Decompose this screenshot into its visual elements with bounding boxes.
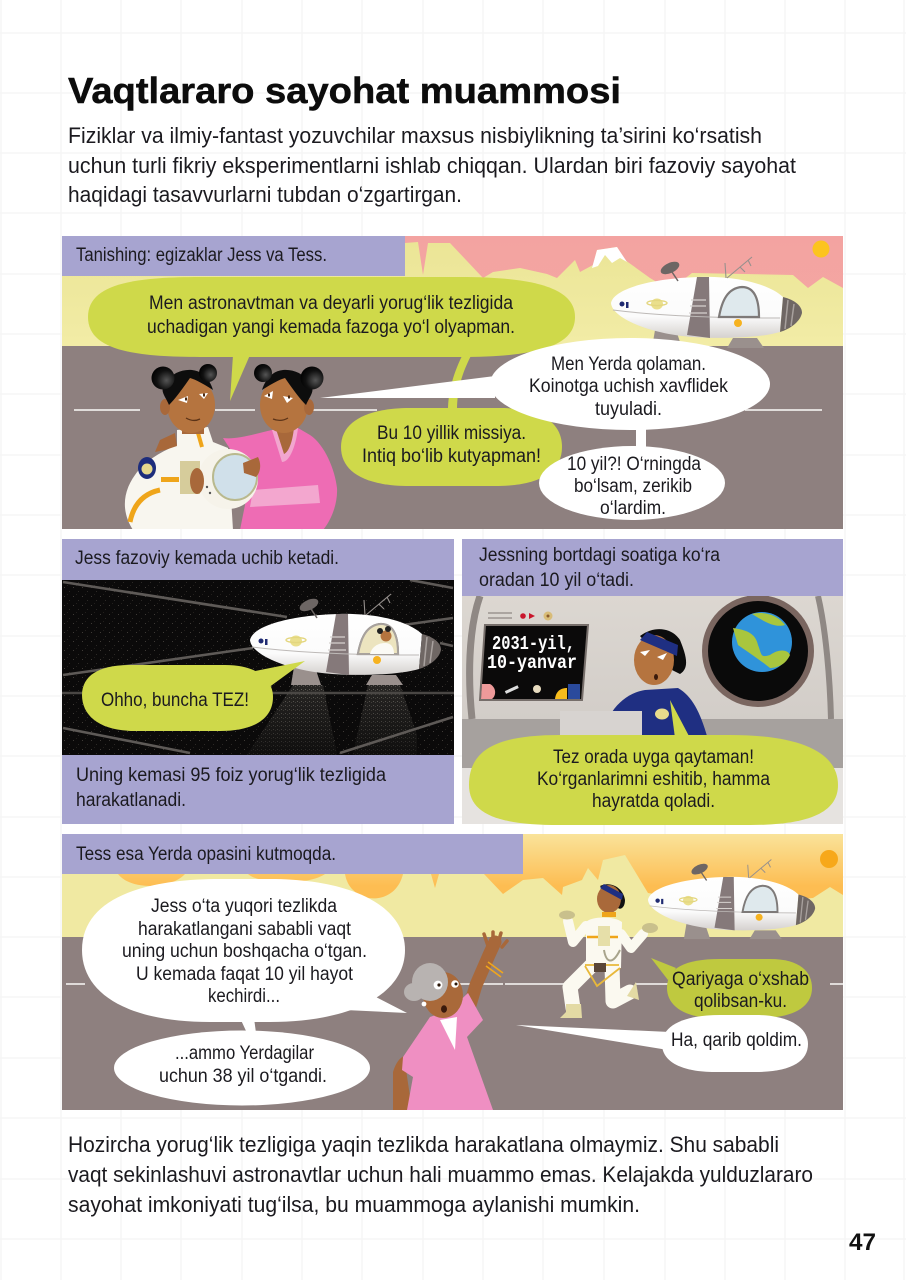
speech bubble: Tess bored [539, 446, 725, 520]
road [62, 937, 843, 1110]
speech bubble: Tess bored: 10 yil?! O‘rningda [567, 454, 701, 475]
speech bubble: coming home [469, 700, 838, 825]
caption: Jessning bortdagi soatiga ko‘ra [479, 545, 720, 566]
spaceship [611, 257, 802, 348]
speech bubble: yes, I got old: Ha, qarib qoldim. [671, 1030, 802, 1051]
caption: bottom [62, 755, 454, 824]
speech bubble: Tess bored: o‘lardim. [600, 498, 666, 519]
speech bubble: Jess astronaut [88, 277, 575, 410]
date screen: 2031-yil, [492, 633, 575, 655]
page number: 47 [849, 1229, 876, 1256]
speech bubble: Tess stays: tuyuladi. [595, 399, 662, 420]
speech bubble: so fast: Ohho, buncha TEZ! [101, 690, 249, 711]
caption: twins [62, 236, 405, 276]
sun [812, 240, 830, 258]
speech bubble: yes, I got old [516, 1015, 808, 1072]
speech bubble: 38 years [114, 1030, 370, 1106]
speech bubble: Jess astronaut: uchadigan yangi kemada fazoga yo‘l olyapman. [147, 317, 515, 338]
speech bubble: Tess stays: Koinotga uchish xavflidek [529, 376, 728, 397]
astronaut Jess [559, 884, 658, 1018]
road [62, 346, 843, 529]
intro paragraph: haqidagi tasavvurlarni tubdan o‘zgartirgan. [68, 182, 462, 207]
speech bubble: time passed differently: Jess o‘ta yuqori tezlikda [151, 896, 337, 917]
speech bubble: 38 years: ...ammo Yerdagilar [175, 1043, 315, 1064]
speech bubble: time passed differently: kechirdi... [208, 986, 280, 1007]
caption: Tess waits: Tess esa Yerda opasini kutmoqda. [76, 844, 336, 865]
Jess at desk [612, 629, 707, 736]
old Tess [393, 932, 507, 1110]
speech bubble: you look old: Qariyaga o‘xshab [672, 969, 809, 990]
panel: ten years on board [462, 539, 843, 825]
caption: bottom: Uning kemasi 95 foiz yorug‘lik tezligida [76, 765, 386, 786]
caption: bottom: harakatlanadi. [76, 790, 186, 811]
speech bubble: Jess astronaut: Men astronavtman va deyarli yorug‘lik tezligida [149, 293, 513, 314]
twins: Tess [223, 364, 337, 530]
speech bubble: coming home: Ko‘rganlarimni eshitib, hamma [537, 769, 770, 790]
speech bubble: you look old [651, 958, 812, 1018]
spaceship [648, 860, 815, 939]
porthole and Earth [702, 595, 814, 707]
closing paragraph: Hozircha yorug‘lik tezligiga yaqin tezlikda harakatlana olmaymiz. Shu sababli [68, 1132, 779, 1157]
panel: Jess flies away [62, 539, 454, 824]
speech bubble: coming home: Tez orada uyga qaytaman! [553, 747, 754, 768]
caption: top [62, 539, 454, 580]
speech bubble: 38 years: uchun 38 yil o‘tgandi. [159, 1066, 327, 1087]
speech bubble: you look old: qolibsan-ku. [694, 991, 787, 1012]
intro paragraph: uchun turli fikriy eksperimentlarni ishlab chiqqan. Ulardan biri fazoviy sayohat [68, 153, 796, 178]
closing paragraph: vaqt sekinlashuvi astronavtlar uchun hali muammo emas. Kelajakda yulduzlararo [68, 1162, 813, 1187]
space scene [62, 580, 454, 755]
speech bubble: coming home: hayratda qoladi. [592, 791, 715, 812]
panel: Tess waits on Earth [62, 834, 843, 1110]
speech bubble: Tess stays [320, 338, 770, 450]
closing paragraph: sayohat imkoniyati tug‘ilsa, bu muammoga aylanishi mumkin. [68, 1192, 640, 1217]
date screen: 10-yanvar [487, 652, 577, 674]
closing paragraph [68, 1132, 813, 1217]
speech bubble: time passed differently: U kemada faqat 10 yil hayot [136, 964, 354, 985]
speech bubble: Jess mission: Bu 10 yillik missiya. [377, 423, 526, 444]
speech bubble: Tess stays: Men Yerda qolaman. [551, 354, 706, 375]
mountains [62, 242, 843, 346]
speech bubble: Jess mission: Intiq bo‘lib kutyapman! [362, 446, 541, 467]
speech bubble: so fast [82, 661, 305, 731]
caption: oradan 10 yil o‘tadi. [479, 570, 634, 591]
intro paragraph: Fiziklar va ilmiy-fantast yozuvchilar maxsus nisbiylikning ta’sirini ko‘rsatish [68, 123, 762, 148]
date screen [480, 625, 588, 700]
speech bubble: time passed differently [82, 879, 407, 1033]
intro paragraph [68, 123, 796, 207]
caption: twins: Tanishing: egizaklar Jess va Tess. [76, 245, 327, 266]
caption [462, 539, 843, 596]
sun [820, 850, 838, 868]
spaceship with Jess [250, 594, 441, 685]
caption: Tess waits [62, 834, 523, 874]
mountains [62, 855, 843, 938]
laptop [560, 711, 642, 735]
twins: Jess [125, 364, 260, 530]
speech bubble: time passed differently: harakatlangani sababli vaqt [138, 919, 352, 940]
panel: meet the twins [62, 236, 843, 530]
cabin interior [462, 595, 843, 824]
speech bubble: Tess bored: bo‘lsam, zerikib [574, 476, 692, 497]
caption: top: Jess fazoviy kemada uchib ketadi. [75, 548, 339, 569]
title: Vaqtlararo sayohat muammosi [68, 70, 621, 111]
speech bubble: time passed differently: uning uchun boshqacha o‘tgan. [122, 941, 367, 962]
speech bubble: Jess mission [341, 408, 562, 486]
